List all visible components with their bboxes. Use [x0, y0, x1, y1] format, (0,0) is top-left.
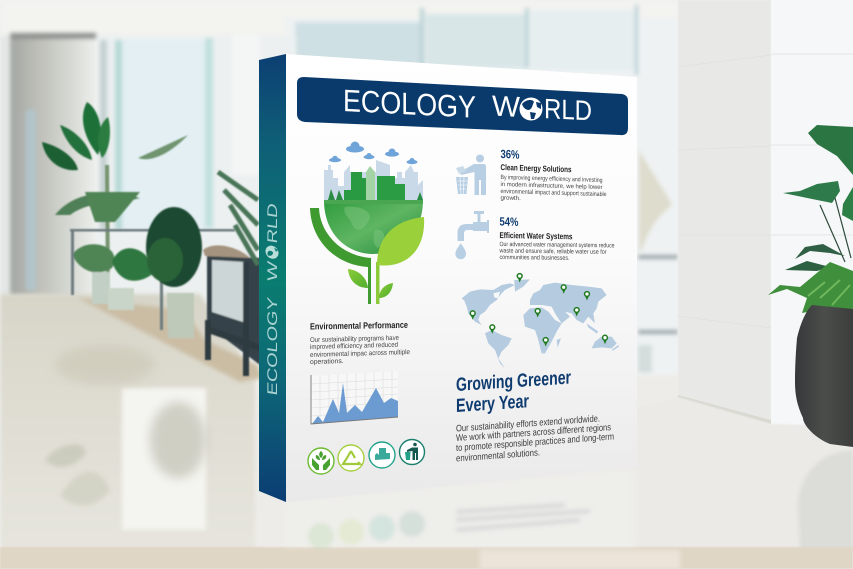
big leaf: [377, 217, 424, 266]
body: improved efficiency and reduced: [310, 342, 398, 351]
heading: Environmental Performance: [310, 320, 408, 331]
white pillar: [678, 0, 853, 430]
stat: clean energy: [456, 147, 607, 202]
world map: [462, 274, 619, 368]
half globe: [324, 200, 423, 254]
map pins: [470, 274, 607, 346]
bench: [203, 245, 262, 376]
small leaf left: [348, 269, 368, 288]
description: in modern infrastructure, we help lower: [500, 181, 602, 191]
area chart: [311, 371, 398, 424]
description: By improving energy efficiency and investing: [500, 174, 603, 184]
railing: [70, 229, 235, 330]
description: [500, 174, 607, 202]
low planter ledge: [78, 298, 262, 382]
description: communities and businesses.: [500, 254, 570, 262]
side panel title: [264, 202, 280, 396]
heading: growing greener: [456, 368, 571, 417]
description: environmental impact and support sustainable: [500, 188, 607, 198]
percent: 36%: [500, 147, 520, 162]
title text: RLD: [544, 93, 592, 126]
description: growth.: [500, 195, 521, 202]
floor reflections: [45, 345, 206, 530]
text block: environmental performance: [310, 320, 410, 366]
title banner: [297, 77, 628, 135]
display box side panel: [259, 54, 286, 502]
body: operations.: [310, 358, 344, 366]
ceiling: [0, 0, 853, 36]
body: environmental impac across multiple: [310, 349, 410, 359]
small leaf right: [379, 283, 393, 298]
pot: [795, 305, 853, 447]
icon row: [308, 440, 424, 474]
paragraph: worldwide efforts: Our sustainability efforts extend worldwide.: [456, 412, 600, 433]
side panel title: RLD: [264, 202, 280, 244]
percent: 54%: [500, 215, 519, 229]
side panel title: ECOLOGY: [264, 295, 280, 396]
heading: growing greener: Growing Greener: [456, 368, 571, 396]
icon: hands with leaves: [308, 448, 334, 474]
left potted plant: [42, 102, 188, 310]
title text: [343, 83, 592, 126]
icon: person with trash bin: [456, 154, 486, 195]
skyline back: [324, 160, 423, 200]
skyline green: [344, 172, 366, 200]
icon: city: [369, 442, 395, 468]
icon: faucet and drop: [455, 211, 489, 259]
display box front panel: [286, 54, 637, 502]
heading: Efficient Water Systems: [500, 230, 573, 241]
icon: recycling: [338, 445, 364, 471]
window behind display: [285, 5, 680, 410]
floor: [0, 294, 262, 569]
icon: globe in title: [520, 98, 542, 120]
stat: water systems: [455, 211, 615, 262]
stem arc: [310, 208, 371, 304]
paragraph: worldwide efforts: to promote responsible practices and long-term: [456, 430, 614, 453]
palm behind the display: [218, 172, 258, 265]
paragraph: worldwide efforts: environmental solutions.: [456, 446, 540, 463]
side panel title: W: [264, 259, 280, 282]
heading: growing greener: Every Year: [456, 391, 529, 417]
description: [499, 241, 615, 262]
marble floor edge: [0, 547, 853, 569]
right potted plant: [768, 125, 853, 447]
glass door and wall: [95, 35, 295, 306]
title text: ECOLOGY: [343, 83, 476, 125]
stem light: [376, 262, 380, 304]
paragraph: worldwide efforts: [456, 412, 614, 463]
title text: W: [492, 91, 521, 124]
dark potted plant: [146, 207, 202, 338]
floor on right: [630, 397, 853, 550]
clouds: [329, 142, 418, 164]
description: Our advanced water management systems reduce: [500, 241, 615, 249]
illustration: eco city plant: [310, 142, 424, 304]
display reflection: [285, 470, 637, 549]
body: [310, 335, 410, 366]
heading: Clean Energy Solutions: [500, 162, 572, 174]
column: [0, 33, 96, 296]
pot reflection: [798, 450, 853, 550]
body: Our sustainability programs have: [310, 335, 399, 344]
paragraph: worldwide efforts: We work with partners across different regions: [456, 421, 611, 443]
icon: person with bin: [400, 440, 424, 464]
description: waste and ensure safe, reliable water use for: [499, 247, 606, 256]
